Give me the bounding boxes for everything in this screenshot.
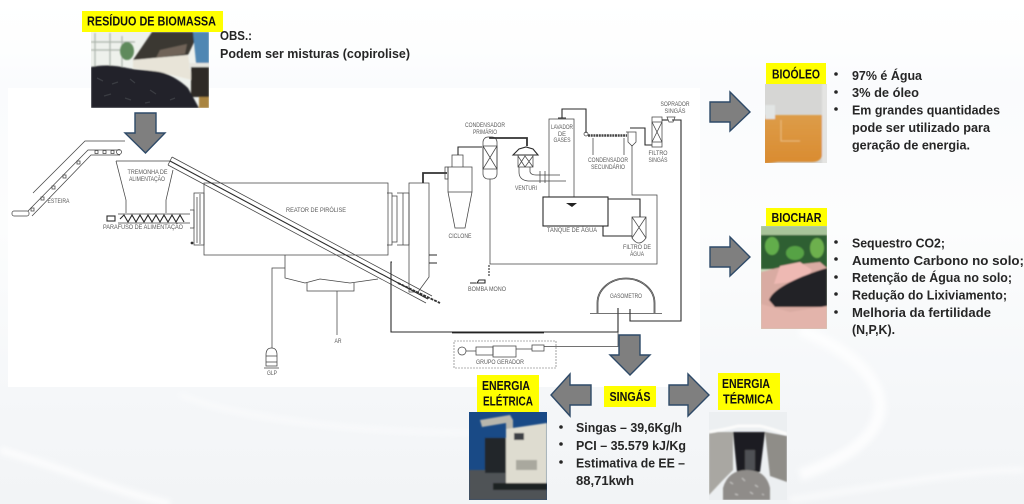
- label: thermal energy: TÉRMICA: [723, 392, 774, 406]
- text: biochar benefits: Aumento Carbono no solo;: [852, 253, 1024, 268]
- label: biomass residue: [82, 11, 223, 32]
- label: syngas: [604, 386, 656, 407]
- cyclone: CICLONE: [448, 234, 472, 240]
- mono pump: BOMBA MONO: [468, 287, 506, 293]
- label: electric energy: ENERGIA: [482, 378, 530, 393]
- mono pump: [468, 280, 506, 293]
- water tank: [543, 197, 608, 234]
- label: thermal energy: ENERGIA: [722, 376, 770, 391]
- secondary condenser: CONDENSADOR: [588, 158, 629, 164]
- air inlet: [334, 291, 342, 345]
- text: bio-oil properties: 97% é Água: [852, 68, 923, 83]
- text: syngas data: [559, 420, 686, 488]
- label: biochar: BIOCHAR: [772, 210, 822, 225]
- small separator and syngas filter: SINGÁS: [648, 157, 668, 164]
- gasometer: [590, 120, 681, 321]
- text: bio-oil properties: Em grandes quantidades: [852, 102, 1000, 118]
- text: bio-oil properties: pode ser utilizado para: [852, 120, 991, 135]
- feed screw: parafuso: PARAFUSO DE ALIMENTAÇÃO: [103, 224, 183, 231]
- arrow: to thermal energy: [669, 374, 709, 416]
- label: bio-oil: BIOÓLEO: [772, 66, 820, 82]
- text: biochar benefits: (N,P,K).: [852, 322, 895, 337]
- label: bio-oil: [766, 63, 826, 84]
- small separator and syngas filter: FILTRO: [648, 151, 668, 157]
- inclined discharge auger: [168, 157, 440, 303]
- photo: biochar in hand: [761, 226, 827, 329]
- text: syngas data: 88,71kwh: [576, 473, 634, 488]
- text: syngas data: PCI – 35.579 kJ/Kg: [576, 438, 686, 453]
- cyclone: [423, 147, 482, 240]
- text: bio-oil properties: [834, 68, 1000, 152]
- photo: burner flame outlet: [709, 412, 787, 500]
- panel: process diagram white background: [8, 88, 700, 387]
- text: bio-oil properties: geração de energia.: [852, 138, 970, 152]
- arrow: biomass to process: [125, 113, 165, 153]
- feed hopper: tremonha: TREMONHA DE: [128, 170, 168, 176]
- arrow: to biochar: [710, 237, 750, 276]
- pyrolysis reactor: [191, 183, 437, 292]
- small separator and syngas filter: [626, 117, 668, 164]
- syngas blower: [660, 102, 690, 122]
- primary condenser: CONDENSADOR: [465, 123, 506, 129]
- note: observation: OBS.:: [220, 28, 252, 43]
- generator group: [454, 332, 618, 368]
- label: electric energy: ELÉTRICA: [483, 394, 533, 408]
- feed screw: parafuso: [103, 210, 194, 231]
- secondary condenser: [584, 132, 629, 171]
- GLP line and cylinder: [264, 268, 285, 377]
- feed hopper: tremonha: ALIMENTAÇÃO: [129, 176, 165, 183]
- air inlet: AR: [334, 339, 342, 345]
- gas scrubber: lavador: [549, 109, 586, 197]
- conveyor: esteira: [12, 141, 125, 216]
- note: observation: Podem ser misturas (copirolise): [220, 46, 410, 61]
- text: biochar benefits: Redução do Lixiviamento;: [852, 288, 1007, 302]
- text: syngas data: Estimativa de EE –: [576, 456, 685, 470]
- water tank: TANQUE DE ÁGUA: [547, 227, 597, 234]
- syngas blower: SINGÁS: [664, 108, 686, 115]
- gas line to gasometer: [391, 262, 618, 332]
- photo: electric generator: [469, 412, 547, 500]
- text: biochar benefits: [834, 236, 1024, 337]
- feed hopper: tremonha: [116, 161, 173, 213]
- venturi: VENTURI: [515, 186, 537, 192]
- GLP line and cylinder: GLP: [267, 371, 277, 377]
- label: syngas: SINGÁS: [610, 389, 651, 404]
- pyrolysis reactor: REATOR DE PIRÓLISE: [286, 207, 346, 214]
- label: biomass residue: RESÍDUO DE BIOMASSA: [87, 14, 217, 28]
- arrow: to bio-oil: [710, 92, 750, 131]
- process flow diagram: [12, 102, 690, 377]
- arrow: to syngas: [610, 335, 650, 375]
- generator group: GRUPO GERADOR: [476, 360, 525, 366]
- photo: biomass residue unloaded from truck: [91, 32, 209, 108]
- label: thermal energy: [718, 373, 780, 410]
- photo: bio-oil beaker: [764, 84, 828, 164]
- arrow: to electric energy: [551, 374, 591, 416]
- water filter: ÁGUA: [630, 251, 644, 258]
- primary condenser: [465, 123, 657, 277]
- label: electric energy: [477, 375, 539, 412]
- gasometer: GASOMETRO: [610, 294, 642, 300]
- water filter: [603, 199, 651, 258]
- gas scrubber: lavador: GASES: [554, 138, 570, 144]
- text: biochar benefits: Retenção de Água no solo;: [852, 270, 1012, 285]
- secondary condenser: SECUNDÁRIO: [591, 164, 625, 171]
- text: syngas data: Singas – 39,6Kg/h: [576, 420, 682, 435]
- gas scrubber: lavador: LAVADOR: [551, 125, 574, 131]
- text: biochar benefits: Sequestro CO2;: [852, 236, 945, 250]
- note: observation: [220, 28, 410, 61]
- text: biochar benefits: Melhoria da fertilidade: [852, 305, 991, 320]
- text: bio-oil properties: 3% de óleo: [852, 85, 919, 100]
- water filter: FILTRO DE: [623, 245, 651, 251]
- gas scrubber: lavador: DE: [558, 132, 566, 138]
- conveyor: esteira: ESTEIRA: [48, 199, 70, 205]
- primary condenser: PRIMÁRIO: [473, 129, 497, 136]
- syngas blower: SOPRADOR: [660, 102, 690, 108]
- venturi: [513, 147, 566, 192]
